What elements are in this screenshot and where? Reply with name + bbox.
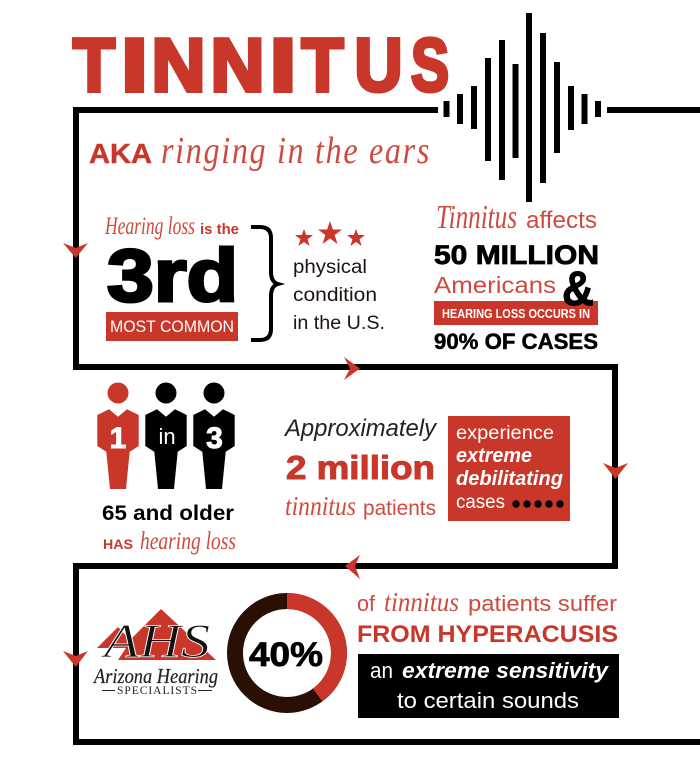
callout: extreme debilitating cases: experience xyxy=(456,423,554,444)
stat: 2 million: 2 million xyxy=(286,449,435,486)
logo: Arizona Hearing Specialists: SPECIALISTS xyxy=(117,685,197,697)
title: T xyxy=(73,23,115,107)
text: of tinnitus patients suffer: patients suffer xyxy=(468,591,617,616)
logo: Arizona Hearing Specialists xyxy=(92,609,218,697)
text: 65 and older: 65 and older xyxy=(102,502,234,525)
label: 1 in 3: 3 xyxy=(206,422,223,455)
label: 1 in 3: 1 xyxy=(110,422,126,455)
label: hearing loss occurs in xyxy=(434,301,598,325)
arrow: down, lower left xyxy=(63,651,88,667)
text: approximately: Approximately xyxy=(283,415,438,442)
text: tinnitus affects: Tinnitus xyxy=(436,199,517,236)
text: has hearing loss: HAS xyxy=(103,536,133,552)
logo: Arizona Hearing Specialists: AHS xyxy=(100,615,210,668)
text: of tinnitus patients suffer: tinnitus xyxy=(384,587,459,617)
callout: extreme debilitating cases: cases xyxy=(456,492,505,513)
title xyxy=(73,23,449,107)
logo: Arizona Hearing Specialists: Arizona Hearing xyxy=(92,664,218,688)
title: U xyxy=(354,23,402,107)
stat: 90% of cases: 90% OF CASES xyxy=(434,329,598,354)
icon: black person xyxy=(193,382,235,489)
callout: extreme debilitating cases xyxy=(448,416,570,521)
chart: 40% donut xyxy=(235,601,339,705)
text: hearing loss is the: Hearing loss xyxy=(104,213,195,240)
stat: 3rd: 3rd xyxy=(107,234,238,317)
text: tinnitus affects xyxy=(436,199,597,236)
text: physical condition in the U.S.: condition xyxy=(293,285,377,306)
heading: AKA ringing in the ears: AKA xyxy=(89,138,152,169)
text: hearing loss is the: is the xyxy=(200,221,239,238)
chart: 40% donut: 40% xyxy=(249,636,323,674)
text: physical condition in the U.S.: physical xyxy=(293,257,367,278)
panel: hyperacusis xyxy=(357,587,619,718)
panel: 2 million patients xyxy=(283,415,570,521)
title: I xyxy=(121,23,148,107)
panel: 1 in 3 xyxy=(97,382,236,555)
callout: extreme sensitivity: an xyxy=(370,658,393,683)
title: S xyxy=(411,23,449,107)
text: has hearing loss xyxy=(103,528,236,555)
text: physical condition in the U.S.: in the U.S. xyxy=(293,313,385,334)
arrow: down, upper left xyxy=(63,243,88,258)
panel: 50 million Americans xyxy=(434,199,599,354)
icon: sound wave xyxy=(444,13,601,202)
label: most common: MOST COMMON xyxy=(110,317,234,336)
icon: black person xyxy=(145,382,187,489)
text: physical condition in the U.S. xyxy=(293,257,385,334)
text: of tinnitus patients suffer: of xyxy=(357,591,376,616)
icon: three stars xyxy=(295,221,365,246)
callout: extreme sensitivity: to certain sounds xyxy=(397,688,579,713)
callout: extreme sensitivity xyxy=(358,654,619,718)
arrow: down, right side xyxy=(603,463,628,479)
text: Americans: Americans xyxy=(434,272,556,298)
label: hearing loss occurs in: HEARING LOSS OCCURS IN xyxy=(442,306,590,321)
icon: red person xyxy=(97,382,139,489)
text: tinnitus patients xyxy=(285,491,436,521)
text: from hyperacusis: FROM HYPERACUSIS xyxy=(357,621,618,648)
text: of tinnitus patients suffer xyxy=(357,587,617,617)
callout: extreme debilitating cases: debilitating xyxy=(456,468,563,490)
callout: extreme debilitating cases: extreme xyxy=(456,445,532,467)
label: 1 in 3: in xyxy=(158,424,176,449)
text: tinnitus affects: affects xyxy=(526,207,597,234)
arrow: right, first divider xyxy=(344,357,360,380)
arrow: left, second divider xyxy=(345,555,360,579)
icon: brace xyxy=(251,227,278,340)
title: N xyxy=(210,23,264,107)
title: N xyxy=(152,23,206,107)
panel: third most common xyxy=(104,213,385,341)
callout: extreme sensitivity: extreme sensitivity xyxy=(402,658,610,683)
title: I xyxy=(270,23,296,107)
title: T xyxy=(302,23,344,107)
text: tinnitus patients: tinnitus xyxy=(285,491,356,521)
heading: AKA ringing in the ears: ringing in the ears xyxy=(161,130,431,172)
heading: AKA ringing in the ears xyxy=(89,130,431,172)
stat: 50 million: 50 MILLION xyxy=(434,240,599,270)
icon: ampersand: & xyxy=(562,263,594,316)
label: 1 in 3 xyxy=(110,422,223,455)
label: most common xyxy=(106,312,238,341)
text: has hearing loss: hearing loss xyxy=(140,528,236,555)
connecting path line xyxy=(76,110,700,742)
text: tinnitus patients: patients xyxy=(363,497,436,520)
